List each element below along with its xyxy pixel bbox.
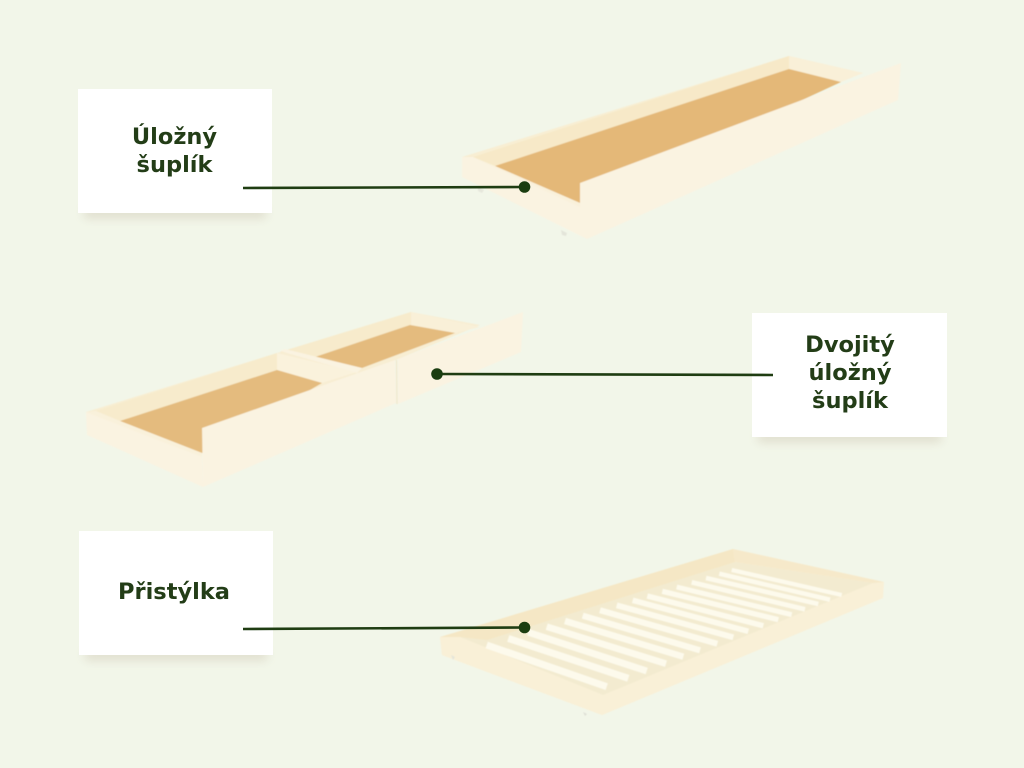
card: Dvojitý úložný šuplík: úložný xyxy=(809,360,892,386)
bed: trundle bed frame with slats xyxy=(440,549,884,716)
callout line: double drawer xyxy=(431,368,773,380)
card: Přistýlka xyxy=(79,531,273,660)
card: Dvojitý úložný šuplík: šuplík xyxy=(812,388,889,414)
card: Úložný šuplík: Úložný xyxy=(132,122,217,150)
card: Úložný šuplík: šuplík xyxy=(137,152,213,178)
card: Přistýlka: Přistýlka xyxy=(118,579,230,605)
callout line: trundle bed xyxy=(243,622,530,633)
slats xyxy=(487,570,842,687)
drawer: single storage drawer xyxy=(462,56,901,239)
drawer: double storage drawer xyxy=(86,312,523,487)
callout line: drawer xyxy=(243,181,530,193)
card: Úložný šuplík xyxy=(78,89,272,218)
card: Dvojitý úložný šuplík xyxy=(752,313,947,442)
card: Dvojitý úložný šuplík: Dvojitý xyxy=(805,332,895,358)
